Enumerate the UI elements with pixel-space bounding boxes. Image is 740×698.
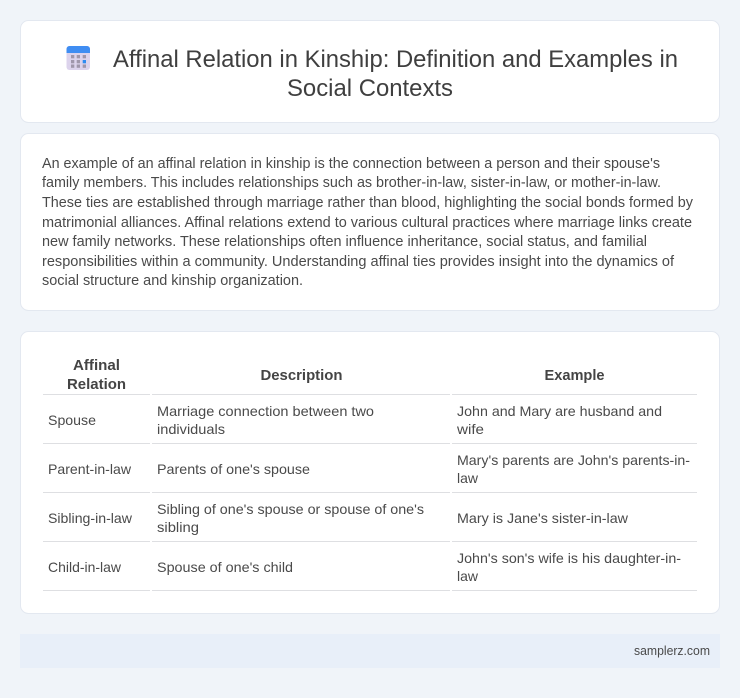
table row: parent-in-law: law: [457, 470, 479, 486]
footer text: samplerz.com: [634, 644, 710, 658]
text block: intro paragraph: An example of an affinal relation in kinship is the connection between a person and their spouse's: [42, 156, 660, 172]
table row: sibling-in-law: Sibling-in-law: [48, 510, 133, 526]
text block: intro paragraph: family members. This includes relationships such as brother-in-law, sister-in-law, or mother-in-law.: [42, 175, 661, 191]
table row: child-in-law: Spouse of one's child: [157, 559, 293, 575]
icon: calendar: [66, 46, 90, 70]
table header: Relation: [67, 377, 126, 393]
title: [113, 46, 678, 102]
table row: spouse: Spouse: [48, 412, 96, 428]
text block: intro paragraph: social structure and kinship organization.: [42, 273, 303, 289]
text block: intro paragraph: These ties are established through marriage rather than blood, highlighting the social bonds formed by: [42, 195, 694, 211]
table row: child-in-law: [48, 550, 681, 584]
table row: child-in-law: Child-in-law: [48, 559, 122, 575]
title: Social Contexts: [287, 75, 453, 102]
table row: spouse: [48, 403, 662, 437]
panel: table card: [20, 332, 720, 614]
table row: sibling-in-law: [48, 501, 629, 535]
table row: child-in-law: John's son's wife is his daughter-in-: [457, 550, 681, 566]
table row: parent-in-law: Parents of one's spouse: [157, 461, 310, 477]
text block: intro paragraph: responsibilities within a community. Understanding affinal ties provides insight into the dynamics of: [42, 254, 675, 270]
table row: parent-in-law: [48, 452, 690, 486]
table row: sibling-in-law: sibling: [157, 519, 199, 535]
table header: Affinal: [73, 358, 120, 374]
panel: intro text card: [20, 134, 720, 310]
footer bar: [20, 634, 720, 668]
table row: parent-in-law: Mary's parents are John's parents-in-: [457, 452, 690, 468]
table row: child-in-law: law: [457, 568, 479, 584]
text block: intro paragraph: matrimonial alliances. Affinal relations extend to various cultural practices where marriage links create: [42, 215, 692, 231]
text block: intro paragraph: [42, 156, 694, 289]
panel: title card: [20, 20, 720, 122]
table row: spouse: Marriage connection between two: [157, 403, 374, 419]
table row: spouse: wife: [456, 421, 484, 437]
table header: [67, 358, 604, 393]
table header: Description: [260, 368, 342, 384]
table row: sibling-in-law: Sibling of one's spouse or spouse of one's: [157, 501, 424, 517]
table row: spouse: John and Mary are husband and: [457, 403, 662, 419]
table row: parent-in-law: Parent-in-law: [48, 461, 132, 477]
table header: Example: [544, 368, 604, 384]
table row: sibling-in-law: Mary is Jane's sister-in-law: [457, 510, 629, 526]
title: Affinal Relation in Kinship: Definition and Examples in: [113, 46, 678, 73]
text block: intro paragraph: new family networks. These relationships often influence inheritance, social status, and familial: [42, 234, 647, 250]
table row: spouse: individuals: [157, 421, 225, 437]
